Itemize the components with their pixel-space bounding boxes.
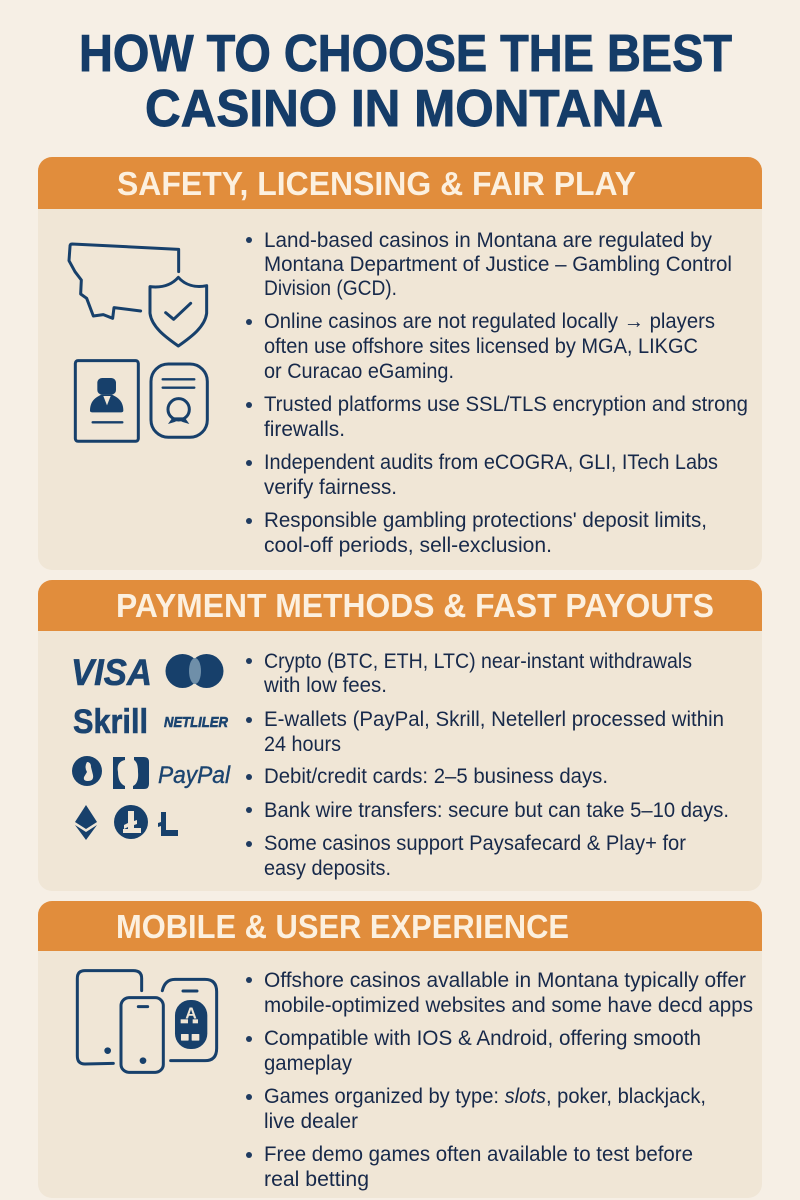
logo: Skrill: Skrill	[73, 703, 148, 741]
icon: shield with check	[150, 277, 207, 346]
bullet: crypto	[246, 650, 692, 697]
bullet: game organization: live dealer	[264, 1110, 358, 1133]
icon: Ethereum	[75, 805, 97, 840]
bullet: offshore licensing: often use offshore sites licensed by MGA, LIKGC	[264, 335, 698, 358]
section header bar: mobile	[38, 901, 762, 951]
bullet: demo games	[246, 1143, 693, 1191]
bullet: bank wire: Bank wire transfers: secure but can take 5–10 days.	[264, 799, 729, 822]
title: HOW TO CHOOSE THE BEST	[79, 25, 732, 83]
bullet: offshore mobile sites	[246, 969, 753, 1017]
bullet: encryption: Trusted platforms use SSL/TLS encryption and strong	[264, 393, 748, 416]
bullet: e-wallets: 24 hours	[264, 733, 341, 756]
bullet: demo games: real betting	[264, 1168, 369, 1191]
title	[79, 25, 732, 138]
icon: Litecoin symbol	[158, 812, 178, 836]
bullet: game organization: Games organized by type: slots, poker, blackjack,	[264, 1085, 706, 1108]
bullet: regulation: Land-based casinos in Montana are regulated by	[264, 229, 712, 252]
panel: payment methods and fast payouts	[38, 580, 762, 891]
bullet: prepaid: Some casinos support Paysafecard & Play+ for	[264, 832, 686, 855]
bullet: e-wallets	[246, 708, 724, 756]
bullet: e-wallets: E-wallets (PayPal, Skrill, Netellerl processed within	[264, 708, 724, 731]
bullet: offshore licensing: or Curacao eGaming.	[264, 360, 454, 383]
bullet: encryption: firewalls.	[264, 418, 345, 441]
icon: phone	[121, 998, 163, 1072]
bullet: encryption	[246, 393, 748, 441]
section heading: mobile: MOBILE & USER EXPERIENCE	[116, 908, 569, 945]
bullet: offshore licensing	[246, 310, 715, 383]
bullet: compatibility: Compatible with IOS & Android, offering smooth	[264, 1027, 701, 1050]
bullet: offshore licensing: Online casinos are not regulated locally → players	[264, 310, 715, 333]
icon: certificate	[151, 364, 207, 437]
icon: wallet brackets	[113, 757, 149, 789]
icon group: Montana map, shield and licence documents	[69, 244, 207, 441]
bullet: prepaid	[246, 832, 686, 880]
bullet: offshore mobile sites: Offshore casinos avallable in Montana typically offer	[264, 969, 746, 992]
logo: Visa: VISA	[71, 652, 152, 693]
bullet: crypto: with low fees.	[263, 674, 387, 697]
bullet list: payments	[246, 650, 729, 880]
icon: Montana outline	[69, 244, 179, 318]
bullet: audits: Independent audits from eCOGRA, GLI, ITech Labs	[264, 451, 718, 474]
panel: mobile and user experience	[38, 901, 762, 1198]
icon: tablet	[77, 971, 142, 1064]
icon group: tablet and phones	[77, 971, 217, 1072]
bullet: game organization	[246, 1085, 706, 1133]
icon group: payment logos	[71, 652, 231, 840]
bullet: responsible gambling	[246, 509, 707, 557]
bullet: compatibility: gameplay	[264, 1052, 352, 1075]
title: CASINO IN MONTANA	[145, 80, 663, 138]
icon: Litecoin coin	[114, 805, 148, 839]
panel: safety, licensing and fair play	[38, 157, 762, 570]
bullet: regulation: Division (GCD).	[264, 277, 397, 300]
section header bar: payments	[38, 580, 762, 631]
bullet list: safety	[246, 229, 748, 557]
bullet: demo games: Free demo games often available to test before	[264, 1143, 693, 1166]
bullet: regulation: Montana Department of Justice – Gambling Control	[264, 253, 732, 276]
bullet: audits	[246, 451, 718, 499]
icon: ID card	[75, 361, 138, 441]
bullet: audits: verify fairness.	[264, 476, 397, 499]
bullet list: mobile	[246, 969, 753, 1191]
bullet: prepaid: easy deposits.	[264, 857, 391, 880]
logo: PayPal: PayPal	[158, 762, 231, 789]
bullet: regulation	[246, 229, 732, 300]
icon: coin	[72, 756, 102, 786]
section header bar: safety	[38, 157, 762, 209]
bullet: responsible gambling: Responsible gambling protections' deposit limits,	[264, 509, 707, 532]
bullet: offshore mobile sites: mobile-optimized websites and some have decd apps	[264, 994, 753, 1017]
section heading: payments: PAYMENT METHODS & FAST PAYOUTS	[116, 587, 714, 624]
icon: phone with casino app: A	[185, 1006, 197, 1023]
bullet: compatibility	[246, 1027, 701, 1075]
section heading: safety: SAFETY, LICENSING & FAIR PLAY	[117, 165, 636, 202]
bullet: responsible gambling: cool-off periods, sell-exclusion.	[264, 534, 552, 557]
logo: Mastercard circles	[166, 654, 224, 688]
bullet: cards: Debit/credit cards: 2–5 business days.	[264, 765, 608, 788]
logo: Neteller: NETLILER	[164, 714, 228, 731]
bullet: crypto: Crypto (BTC, ETH, LTC) near-instant withdrawals	[264, 650, 692, 673]
